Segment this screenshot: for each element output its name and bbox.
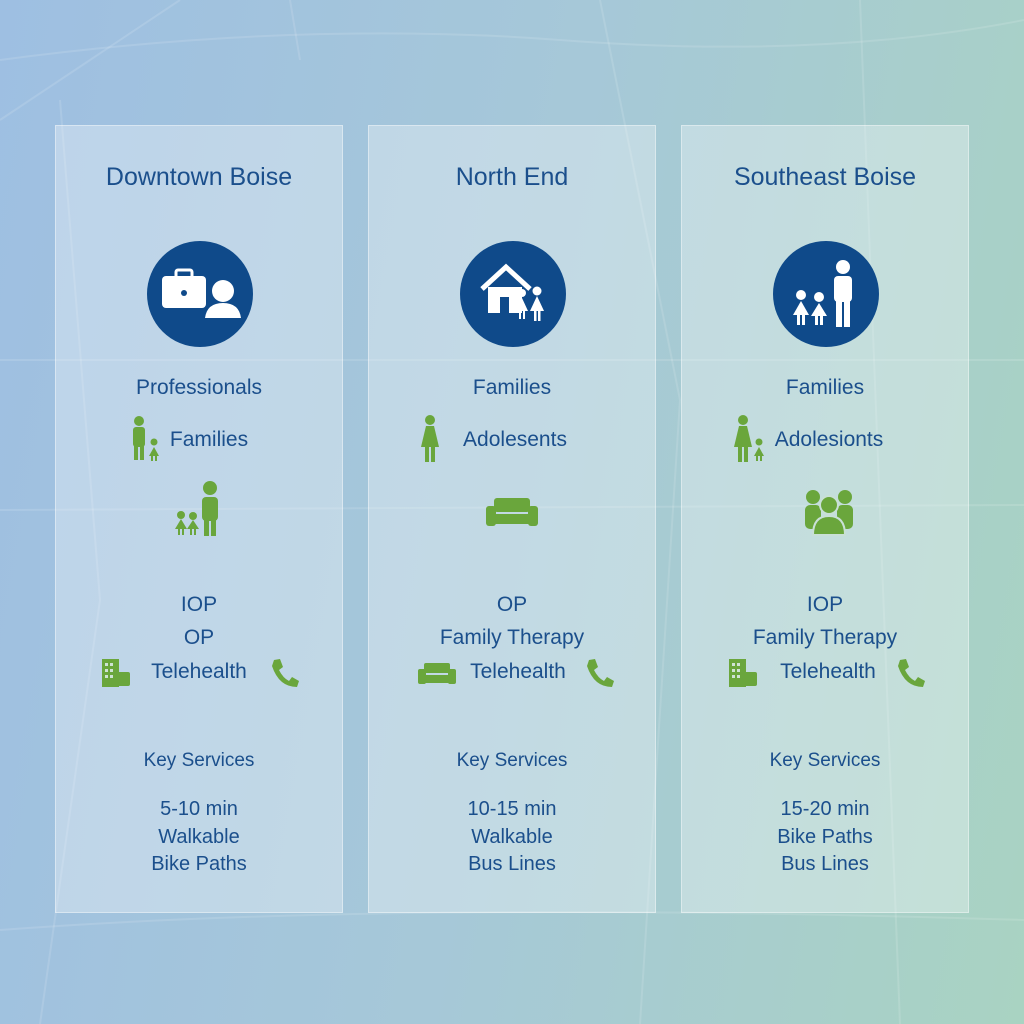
icon: woman (421, 415, 439, 462)
icon: phone (272, 659, 299, 687)
heading: North End (456, 163, 568, 191)
access info (151, 798, 247, 875)
icon: parent child (133, 416, 159, 461)
access info: Walkable (471, 826, 553, 848)
access info: 10-15 min (468, 798, 556, 820)
icon: phone (898, 659, 925, 687)
access info: Bike Paths (777, 826, 873, 848)
panel: North End (368, 125, 656, 913)
text: Families: Families (786, 376, 864, 399)
icon: woman child (734, 415, 764, 462)
access info: Bus Lines (468, 853, 556, 875)
access info (777, 798, 873, 875)
text: Families with icon: Families (170, 428, 248, 451)
access info (468, 798, 556, 875)
access info: Bike Paths (151, 853, 247, 875)
text: Adolesents: Adolesents (463, 428, 567, 451)
icon: house family circle (460, 241, 566, 347)
icon: family circle (773, 241, 879, 347)
text: Key Services: Key Services (457, 750, 567, 771)
panel: North End: Telehealth (470, 660, 566, 683)
panel: Southeast Boise: Telehealth (780, 660, 876, 683)
access info: Walkable (158, 826, 240, 848)
services list: IOP (181, 593, 217, 616)
access info: Bus Lines (781, 853, 869, 875)
panel: Southeast Boise: Family Therapy (753, 626, 897, 649)
icon: sofa small (418, 663, 456, 684)
panel: Downtown Boise (55, 125, 343, 913)
icon: professional circle (147, 241, 253, 347)
text: Key Services: Key Services (144, 750, 254, 771)
services list: OP (497, 593, 527, 616)
access info: 15-20 min (781, 798, 869, 820)
panel: Southeast Boise (681, 125, 969, 913)
heading: Downtown Boise (106, 163, 292, 191)
icon: group (805, 490, 853, 534)
icon: phone (587, 659, 614, 687)
text: Professionals: Professionals (136, 376, 262, 399)
services list: IOP (807, 593, 843, 616)
access info: 5-10 min (160, 798, 238, 820)
icon: building (102, 659, 130, 687)
text: Key Services: Key Services (770, 750, 880, 771)
panel: Downtown Boise: Telehealth (151, 660, 247, 683)
heading: Southeast Boise (734, 163, 916, 191)
text: Families: Families (473, 376, 551, 399)
panel: Downtown Boise: OP (184, 626, 214, 649)
panel: North End: Family Therapy (440, 626, 584, 649)
text: Adolesionts: Adolesionts (775, 428, 883, 451)
icon: sofa (486, 498, 538, 526)
icon: building (729, 659, 757, 687)
icon: family (175, 481, 218, 536)
